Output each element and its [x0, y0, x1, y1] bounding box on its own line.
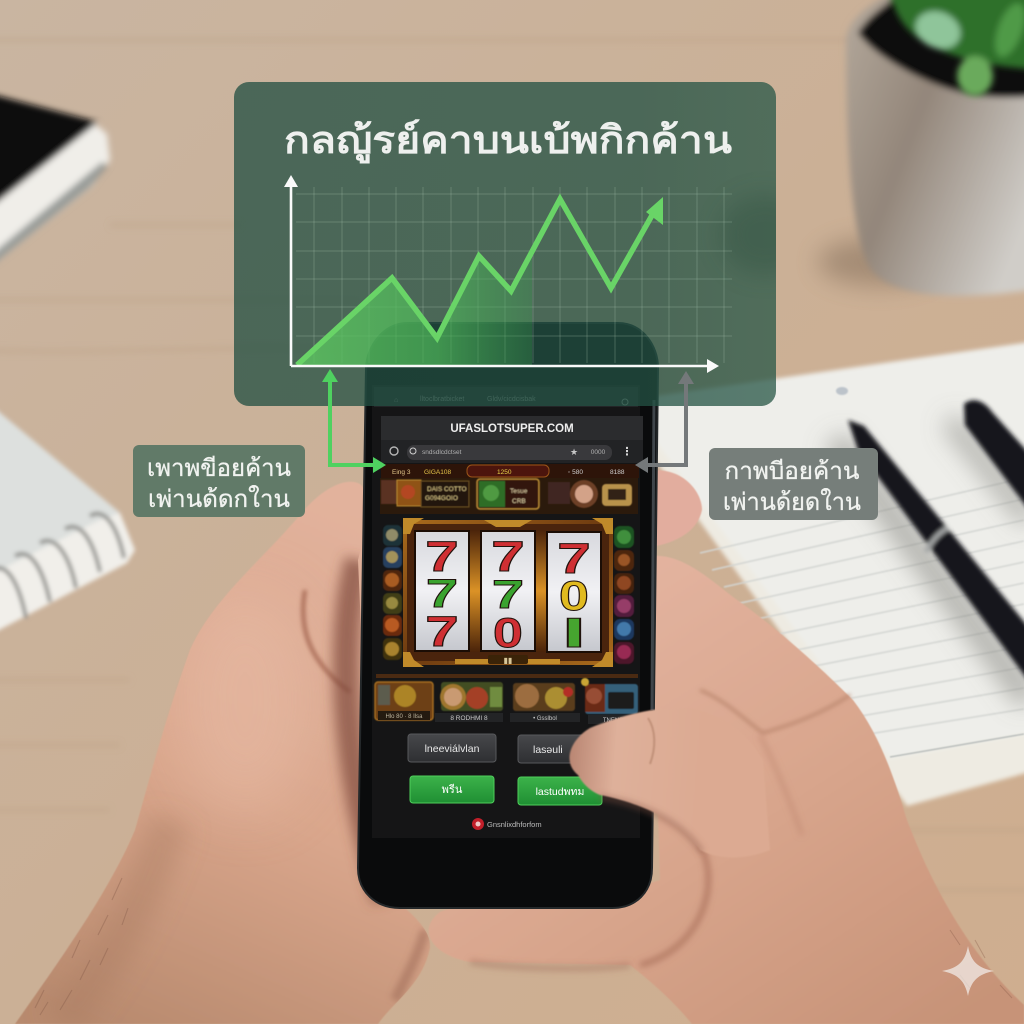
slot machine reels: ▮▮ [504, 656, 512, 665]
slot machine reels: 7 [557, 535, 591, 583]
callout: left label [133, 445, 305, 517]
slot machine reels: 7 [492, 572, 524, 617]
game thumbnails: Hlo 80 · 8 Ilsa [385, 714, 423, 720]
heading: กลญู้รย์คาบนเบ้พกิกค้าน [284, 119, 732, 164]
phone screen: Gldv/cicdcisbak [487, 396, 536, 403]
callout: left label: เพาพขีอยค้าน [147, 455, 291, 482]
arrow: green connector [322, 369, 386, 473]
callout: left label: เพ่านด้ดกใาน [148, 485, 290, 513]
browser address title bar: ★ [570, 447, 578, 457]
side icons left [383, 525, 402, 660]
phone body [358, 323, 658, 908]
game top status strip [381, 464, 639, 478]
slot machine reels: 7 [425, 608, 459, 656]
icon: sparkle [942, 946, 994, 996]
phone screen: ⌂ [394, 397, 398, 404]
phone screen: lltoclbratbicket [420, 396, 464, 403]
pens [835, 400, 1024, 702]
right thumb [569, 708, 770, 858]
game top status strip: 1250 [497, 469, 512, 476]
lined notepad [655, 340, 1024, 806]
game banner row: DAIS COTTO [427, 486, 467, 493]
green button left [410, 776, 494, 803]
phone screen [372, 385, 643, 838]
spiral notebook [0, 396, 135, 640]
slot machine reels: 7 [491, 533, 525, 581]
grey button left: lneeviálvlan [425, 743, 480, 755]
plant pot [818, 0, 1024, 296]
game top status strip: 8188 [610, 469, 625, 476]
slot machine reels: 7 [425, 533, 459, 581]
right hand fingers [429, 470, 1024, 1024]
slot machine reels: 7 [426, 571, 458, 616]
slot machine reels: 0 [559, 572, 589, 620]
left hand [15, 482, 430, 1024]
browser address title bar: UFASLOTSUPER.COM [450, 423, 574, 435]
grey button left [408, 734, 496, 762]
line chart [284, 175, 732, 373]
callout: right label: กาพบีอยค้าน [724, 458, 860, 485]
browser address title bar: sndsdlcdctset [422, 449, 462, 456]
slot machine reels [403, 518, 613, 667]
game banner row: G094GOIO [425, 495, 458, 502]
slot machine reels: 0 [493, 609, 523, 657]
browser address title bar: 0000 [591, 449, 606, 456]
game top status strip: Eing 3 [392, 469, 411, 476]
game thumbnails [375, 674, 638, 724]
game thumbnails: 8 RODHMI 8 [450, 715, 488, 722]
game thumbnails: • Gsslbol [533, 716, 557, 722]
game top status strip: ◦ 580 [568, 469, 583, 476]
game thumbnails: TNENS [603, 718, 623, 724]
footer note [472, 818, 542, 830]
black notebook [0, 91, 110, 275]
side icons right [614, 526, 634, 664]
callout: right label [709, 448, 878, 520]
green button left: พรีน [442, 783, 463, 796]
slot machine reels: I [562, 610, 586, 656]
panel: chart [234, 82, 810, 406]
green button right: lastudพทม [536, 786, 584, 798]
browser address title bar [381, 416, 643, 463]
game top status strip: GIGA108 [424, 469, 451, 476]
browser address title bar: ⋮ [622, 446, 632, 458]
grey button right: lasəuli [533, 744, 563, 756]
game banner row: Tesue [510, 488, 528, 495]
game banner row [380, 478, 638, 514]
grey button right [518, 735, 602, 763]
footer note: Gnsnlixdhforfom [487, 820, 542, 829]
green button right [518, 777, 602, 805]
game banner row: CRB [512, 498, 526, 505]
callout: right label: เพ่านด้ยดใาน [723, 488, 861, 516]
phone [358, 323, 658, 908]
arrow: grey connector [635, 371, 694, 473]
